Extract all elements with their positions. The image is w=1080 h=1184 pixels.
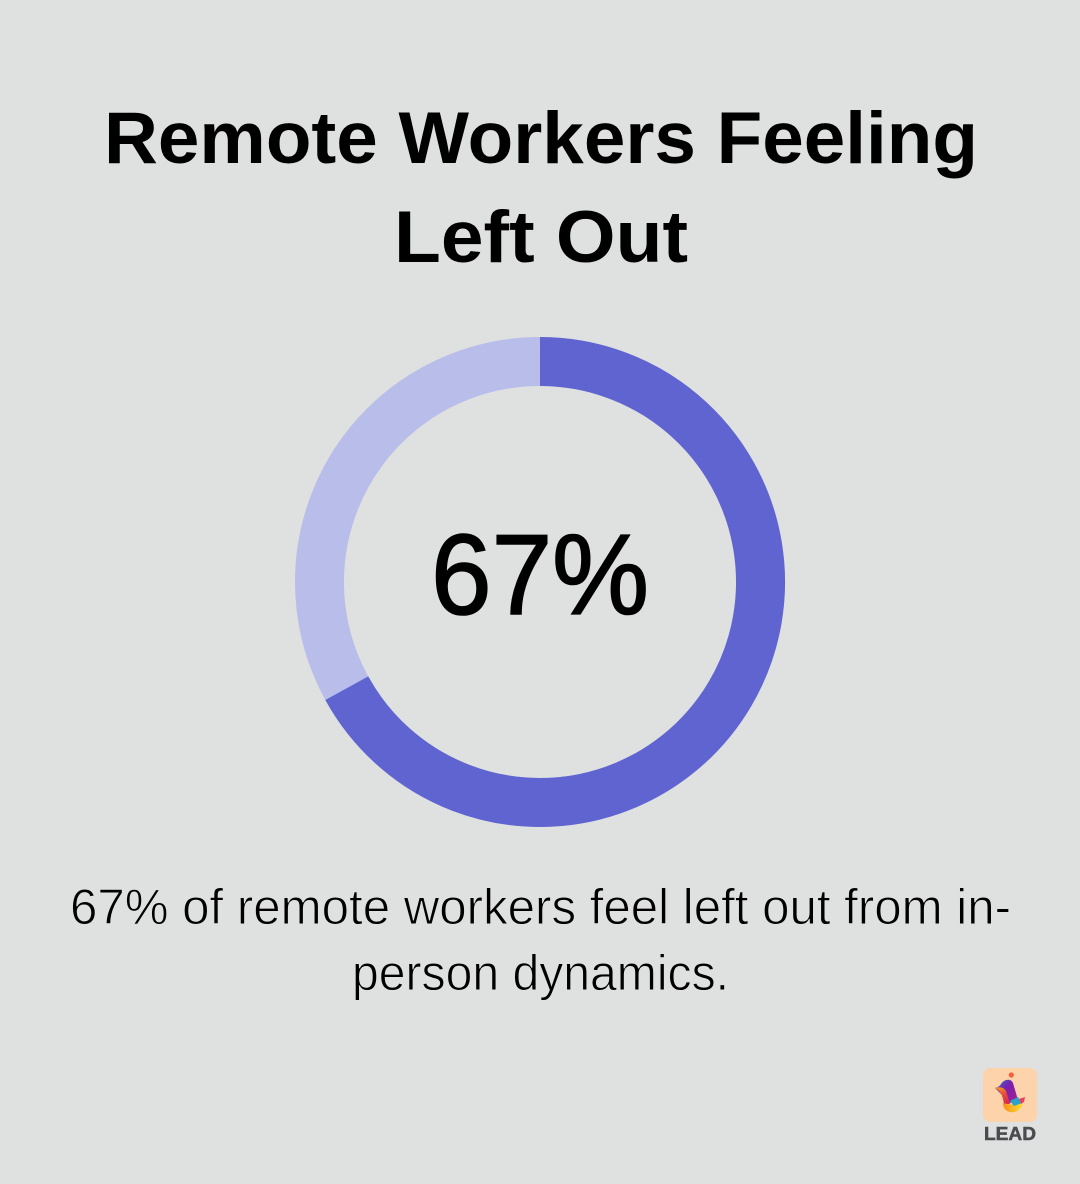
logo tile (983, 1068, 1037, 1122)
title: Left Out (394, 197, 688, 278)
center value: 67% (431, 512, 649, 639)
description text: person dynamics. (352, 945, 729, 1001)
description text (70, 879, 1011, 1001)
title: Remote Workers Feeling (104, 98, 978, 179)
logo: LEAD (983, 1068, 1037, 1144)
logo wordmark: LEAD (984, 1124, 1036, 1144)
donut chart: 67% (320, 362, 761, 802)
title (104, 98, 978, 278)
logo bird mark (995, 1072, 1025, 1112)
description text: 67% of remote workers feel left out from in- (70, 879, 1011, 935)
